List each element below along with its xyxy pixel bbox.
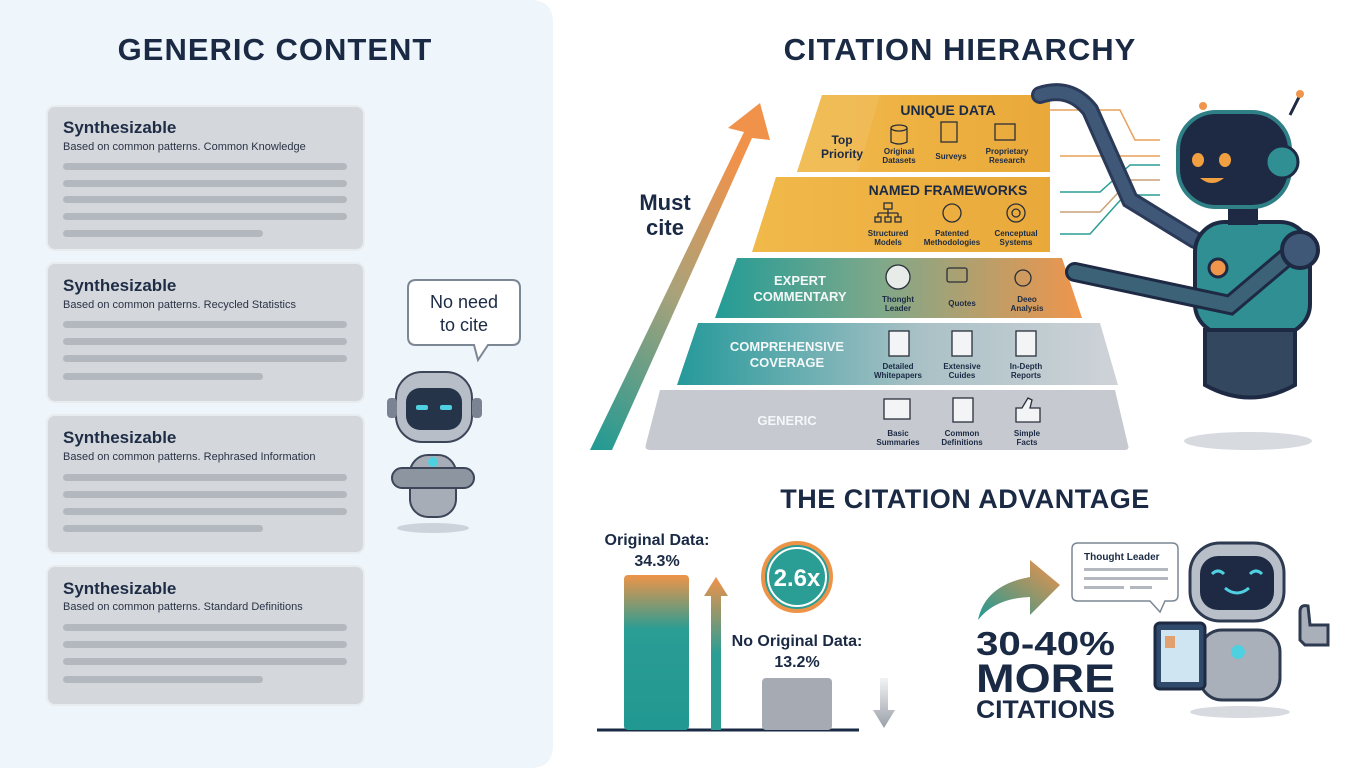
tier: named frameworks: Systems (1000, 238, 1033, 247)
card 1 (47, 106, 364, 250)
panel: generic content (0, 0, 553, 768)
tier: unique data: Datasets (882, 156, 916, 165)
tier: expert commentary: Quotes (948, 299, 976, 308)
icon: circuit lines (1050, 110, 1160, 234)
icon: robot arms crossed (387, 372, 482, 533)
callout: thought leader (1072, 543, 1178, 612)
tier: named frameworks: Structured (868, 229, 908, 238)
tier: generic: Simple (1014, 429, 1041, 438)
card 2: Based on common patterns. Recycled Statistics (63, 299, 296, 311)
card 4: Synthesizable (63, 579, 176, 598)
bar: original data (624, 575, 689, 730)
tier: unique data: Top (831, 133, 853, 147)
badge: 2.6x: 2.6x (774, 565, 821, 592)
tier: generic: Facts (1017, 438, 1038, 447)
card 2 (47, 263, 364, 402)
tier: unique data: Original (884, 147, 914, 156)
icon: curved arrow (978, 560, 1060, 620)
tier: named frameworks: Patented (935, 229, 969, 238)
callout: thought leader: Thought Leader (1084, 552, 1160, 563)
callout: no need to cite (408, 280, 520, 360)
bar chart: 13.2% (774, 654, 820, 671)
stat: 30-40% more citations (976, 625, 1115, 724)
tier: expert commentary: Thonght (882, 295, 914, 304)
bar: no original data (762, 678, 832, 730)
tier: expert commentary: COMMENTARY (753, 289, 847, 304)
icon: pointing robot (1040, 90, 1318, 450)
tier: unique data: Surveys (935, 152, 967, 161)
tier: unique data: Proprietary (986, 147, 1029, 156)
tier: comprehensive coverage: In-Depth (1010, 362, 1042, 371)
tier: comprehensive coverage: Whitepapers (874, 371, 923, 380)
card 3: Synthesizable (63, 428, 176, 447)
tier: generic: Definitions (941, 438, 983, 447)
card 1: Based on common patterns. Common Knowledge (63, 141, 306, 153)
callout: no need to cite: No need (430, 292, 498, 312)
arrow: must cite diagonal (590, 103, 770, 450)
tier: expert commentary (715, 258, 1082, 318)
tier: unique data: Priority (821, 147, 863, 161)
label: must cite: cite (646, 215, 684, 240)
heading: citation hierarchy: CITATION HIERARCHY (784, 32, 1136, 67)
tier: named frameworks (752, 177, 1050, 252)
card 3: Based on common patterns. Rephrased Information (63, 451, 316, 463)
tier: generic: Common (945, 429, 979, 438)
card 4 (47, 566, 364, 705)
tier: expert commentary: Leader (885, 304, 911, 313)
arrow up (704, 577, 728, 730)
tier: comprehensive coverage (677, 323, 1118, 385)
tier: expert commentary: Analysis (1011, 304, 1044, 313)
tier: expert commentary: Deeo (1017, 295, 1037, 304)
heading: generic content: GENERIC CONTENT (118, 32, 432, 67)
label: must cite: Must (639, 190, 691, 215)
arrow down (873, 678, 895, 728)
card 3 (47, 415, 364, 553)
icon: thumbs up robot (1155, 543, 1328, 718)
badge: 2.6x (763, 543, 831, 611)
tier: comprehensive coverage: Reports (1011, 371, 1042, 380)
tier: named frameworks: Cenceptual (994, 229, 1038, 238)
tier: unique data: Research (989, 156, 1025, 165)
stat: 30-40% more citations: CITATIONS (976, 696, 1115, 724)
tier: named frameworks: Models (874, 238, 902, 247)
tier: expert commentary: EXPERT (774, 273, 826, 288)
card 1: Synthesizable (63, 118, 176, 137)
tier: generic: GENERIC (757, 413, 817, 428)
tier: comprehensive coverage: Extensive (943, 362, 981, 371)
tier: named frameworks: NAMED FRAMEWORKS (869, 182, 1027, 198)
bar chart (597, 532, 895, 730)
tier: comprehensive coverage: COVERAGE (750, 355, 825, 370)
stat: 30-40% more citations: MORE (976, 657, 1115, 701)
heading: the citation advantage: THE CITATION ADVANTAGE (780, 484, 1150, 514)
pyramid (646, 95, 1128, 450)
bar chart: Original Data: (605, 532, 709, 549)
tier: comprehensive coverage: Cuides (949, 371, 976, 380)
tier: comprehensive coverage: COMPREHENSIVE (730, 339, 844, 354)
stat: 30-40% more citations: 30-40% (976, 625, 1115, 662)
tier: unique data: UNIQUE DATA (900, 102, 996, 118)
card 4: Based on common patterns. Standard Definitions (63, 601, 303, 613)
tier: generic (646, 390, 1128, 450)
bar chart: 34.3% (634, 553, 680, 570)
tier: comprehensive coverage: Detailed (882, 362, 914, 371)
tier: unique data (797, 95, 1050, 172)
card 2: Synthesizable (63, 276, 176, 295)
callout: no need to cite: to cite (440, 315, 488, 335)
bar chart: No Original Data: (732, 633, 862, 650)
tier: named frameworks: Methodologies (924, 238, 981, 247)
tier: generic: Summaries (876, 438, 920, 447)
tier: generic: Basic (887, 429, 909, 438)
